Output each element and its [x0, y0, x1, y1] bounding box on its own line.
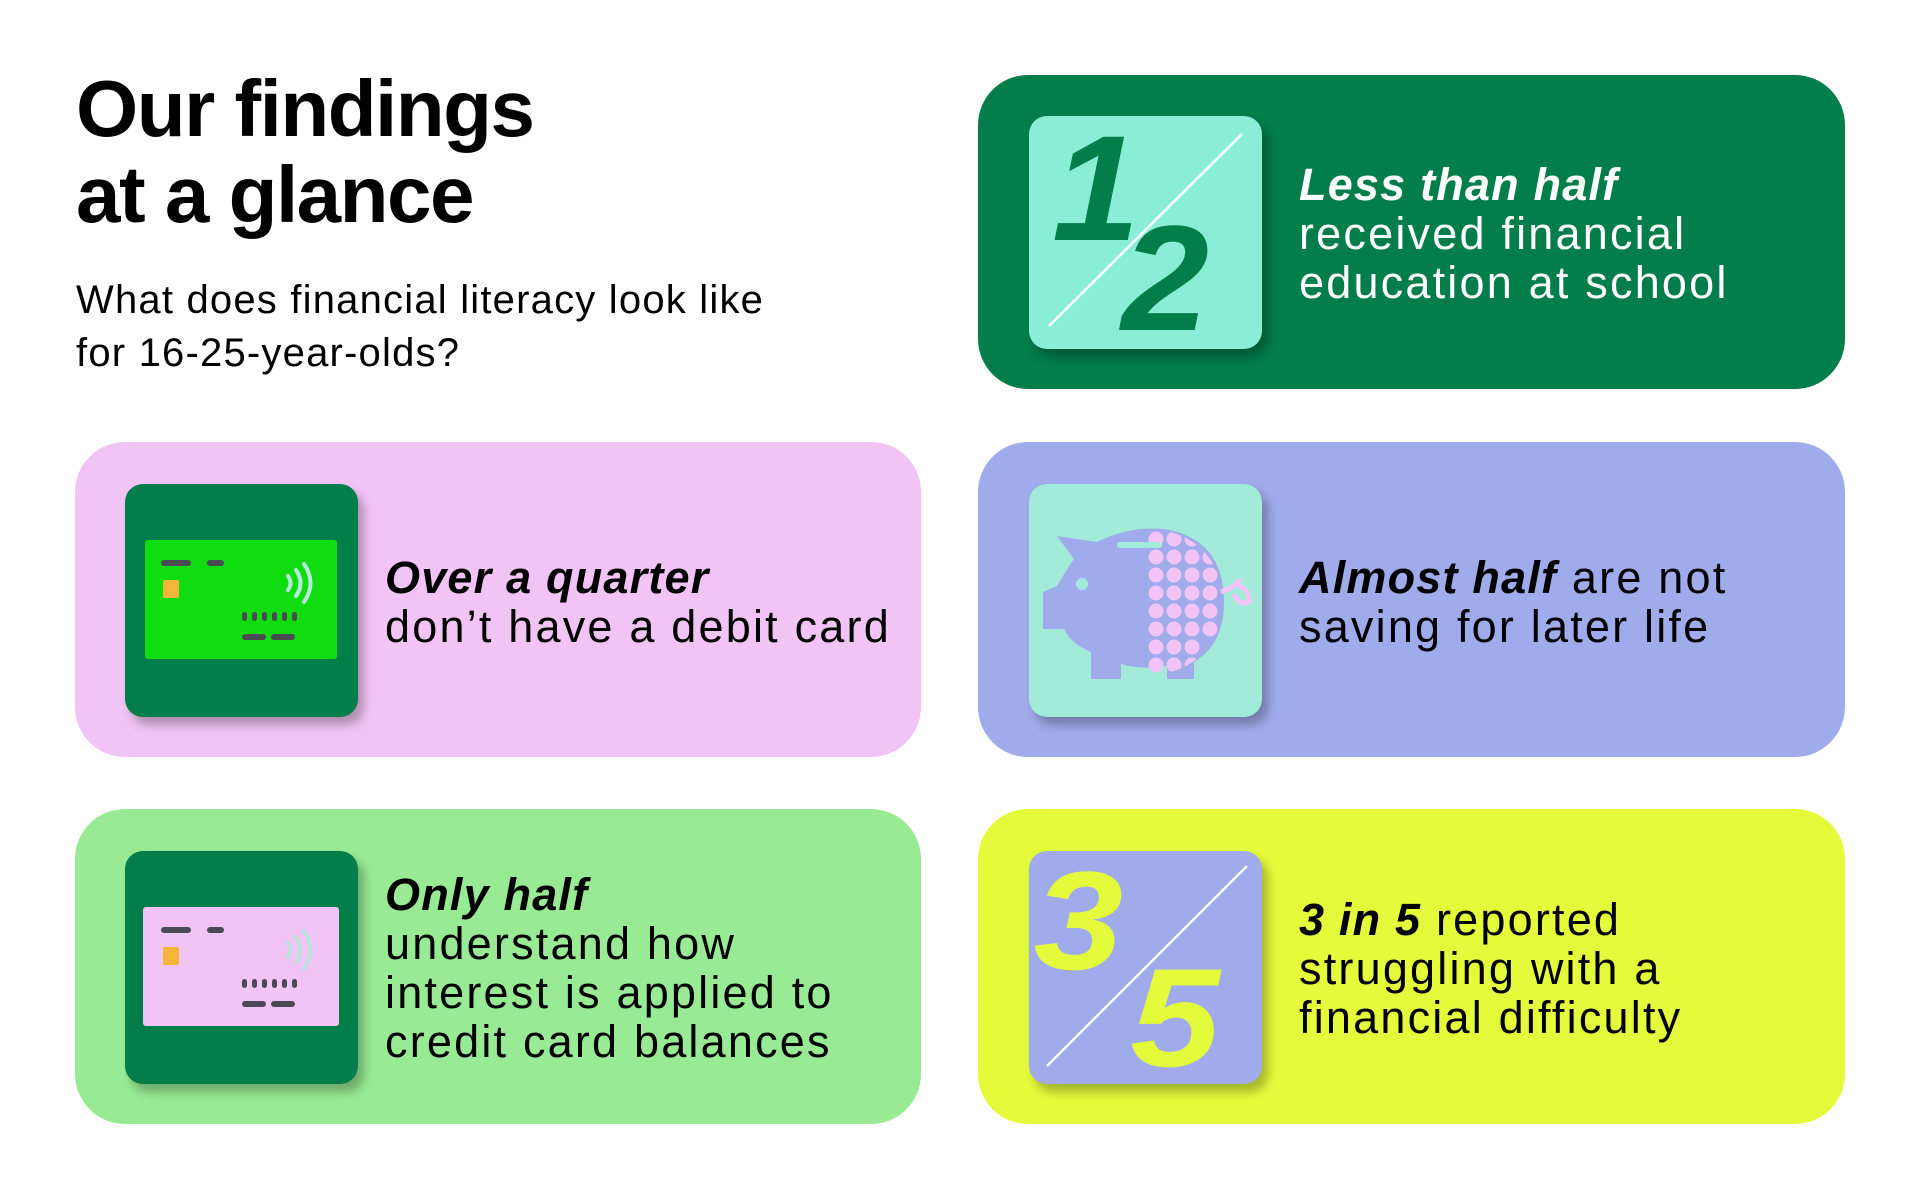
text: 3 in 5 [1299, 894, 1682, 1043]
icon: credit card [125, 851, 358, 1084]
text: less than half: received financial [1299, 208, 1686, 259]
text: only half: credit card balances [385, 1016, 832, 1067]
text: almost half [1298, 552, 1727, 652]
text: less than half [1299, 159, 1729, 308]
text: almost half: saving for later life [1299, 601, 1710, 652]
panel: 3 in 5 [978, 809, 1845, 1124]
text: only half [385, 869, 834, 1067]
text: less than half: Less than half [1299, 159, 1618, 210]
text: over a quarter: don’t have a debit card [385, 601, 891, 652]
text: almost half: Almost half are not [1299, 552, 1727, 603]
panel: less than half [978, 75, 1845, 389]
panel: only half [75, 809, 921, 1124]
text: 3 in 5: financial difficulty [1299, 992, 1682, 1043]
panel: over a quarter [75, 442, 921, 757]
icon: debit card [125, 484, 358, 717]
icon: three fifths fraction [1029, 851, 1262, 1084]
title [76, 64, 534, 239]
text: 3 in 5: struggling with a [1299, 943, 1662, 994]
subtitle: What does financial literacy look like [76, 278, 764, 322]
text: less than half: education at school [1299, 257, 1729, 308]
text: only half: understand how [385, 918, 736, 969]
icon: one half fraction [1029, 116, 1262, 349]
subtitle [76, 278, 764, 375]
text: over a quarter [385, 552, 891, 652]
icon: piggy bank [1029, 484, 1262, 717]
text: only half: Only half [385, 869, 588, 920]
subtitle: for 16-25-year-olds? [76, 331, 460, 375]
panel: almost half [978, 442, 1845, 757]
text: only half: interest is applied to [385, 967, 834, 1018]
title: at a glance [76, 150, 473, 239]
title: Our findings [76, 64, 534, 153]
text: over a quarter: Over a quarter [385, 552, 709, 603]
text: 3 in 5: 3 in 5 reported [1299, 894, 1621, 945]
